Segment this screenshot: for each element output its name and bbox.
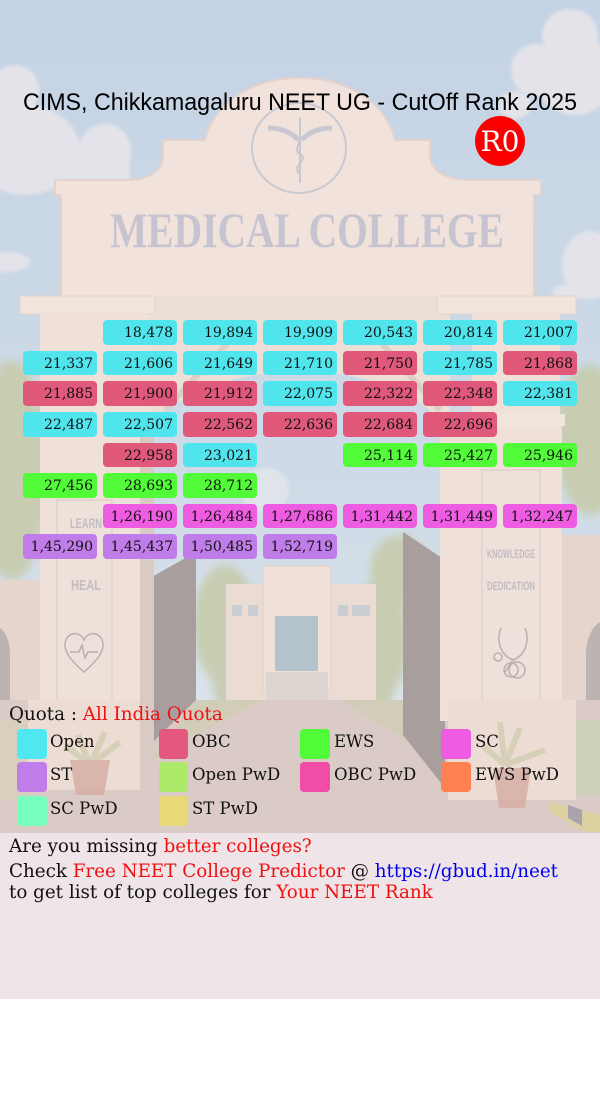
cutoff rank grid: 19,894	[204, 325, 253, 341]
cutoff rank grid: 22,487	[44, 417, 93, 433]
cutoff rank grid: 23,021	[204, 448, 253, 464]
cutoff rank grid: 21,912	[204, 386, 253, 402]
cutoff rank grid: 21,868	[524, 356, 573, 372]
cutoff rank grid: 22,696	[444, 417, 493, 433]
cutoff rank grid: 22,636	[284, 417, 333, 433]
round badge: R0: R0	[481, 125, 519, 158]
cutoff rank grid: 1,45,290	[31, 539, 93, 555]
icon: heart	[65, 634, 103, 672]
arch beam	[140, 296, 450, 425]
cutoff rank grid: 21,649	[204, 356, 253, 372]
legend: SC PwD	[50, 799, 118, 818]
cutoff rank grid: 28,693	[124, 478, 173, 494]
cutoff rank grid: 27,456	[44, 478, 93, 494]
cutoff rank grid: 1,32,247	[511, 508, 573, 524]
legend: OBC PwD	[334, 765, 416, 784]
promo body: to get list of top colleges for Your NEET Rank	[9, 882, 433, 903]
cutoff rank grid: 21,007	[524, 325, 573, 341]
cutoff rank grid: 25,946	[524, 448, 573, 464]
central building	[226, 566, 376, 710]
cutoff rank grid	[23, 320, 577, 559]
cutoff rank grid: 22,562	[204, 417, 253, 433]
cutoff rank grid: 1,52,719	[271, 539, 333, 555]
cutoff rank grid: 20,543	[364, 325, 413, 341]
title: CIMS, Chikkamagaluru NEET UG - CutOff Rank 2025	[23, 89, 577, 116]
legend: EWS PwD	[475, 765, 559, 784]
cutoff rank grid: 22,075	[284, 386, 333, 402]
cutoff rank grid: 21,900	[124, 386, 173, 402]
background sign: MEDICAL COLLEGE	[110, 202, 504, 258]
icon: stethoscope	[494, 628, 527, 678]
cutoff rank grid: 20,814	[444, 325, 493, 341]
cutoff rank grid: 1,31,449	[431, 508, 493, 524]
cutoff rank grid: 19,909	[284, 325, 333, 341]
pier words: KNOWLEDGE	[487, 547, 535, 561]
cutoff rank grid: 21,710	[284, 356, 333, 372]
cutoff rank grid: 1,26,190	[111, 508, 173, 524]
cutoff rank grid: 25,114	[364, 448, 413, 464]
cutoff rank grid: 25,427	[444, 448, 493, 464]
cutoff rank grid: 18,478	[124, 325, 173, 341]
potted plants	[65, 722, 545, 808]
cutoff rank grid: 28,712	[204, 478, 253, 494]
cutoff rank grid: 21,785	[444, 356, 493, 372]
gates	[150, 532, 445, 788]
quota label: Quota : All India Quota	[9, 704, 223, 725]
legend: Open PwD	[192, 765, 280, 784]
cutoff rank grid: 1,45,437	[111, 539, 173, 555]
legend: OBC	[192, 732, 231, 751]
legend: ST	[50, 765, 72, 784]
pier words: DEDICATION	[487, 579, 535, 593]
legend: Open	[50, 732, 94, 751]
cutoff rank grid: 22,381	[524, 386, 573, 402]
pediment	[55, 78, 541, 300]
cutoff rank grid: 21,885	[44, 386, 93, 402]
pier words: LEARN	[70, 515, 102, 531]
trees	[0, 360, 600, 715]
promo panel	[0, 833, 600, 999]
promo body: Check Free NEET College Predictor @ https://gbud.in/neet	[9, 861, 558, 882]
cutoff rank grid: 1,31,442	[351, 508, 413, 524]
legend: SC	[475, 732, 499, 751]
round badge: R0	[475, 116, 525, 166]
legend	[17, 729, 559, 826]
pier words: HEAL	[71, 577, 101, 594]
cutoff rank grid: 21,337	[44, 356, 93, 372]
left pier	[20, 296, 155, 790]
cutoff rank grid: 22,507	[124, 417, 173, 433]
right bushes and curb	[550, 720, 600, 832]
cutoff rank grid: 1,26,484	[191, 508, 253, 524]
cutoff rank grid: 21,750	[364, 356, 413, 372]
right pier	[437, 296, 576, 800]
cutoff rank grid: 22,958	[124, 448, 173, 464]
emblem	[252, 103, 346, 193]
legend: ST PwD	[192, 799, 258, 818]
cutoff rank grid: 22,322	[364, 386, 413, 402]
legend: EWS	[334, 732, 374, 751]
cutoff rank grid: 21,606	[124, 356, 173, 372]
cutoff rank grid: 22,684	[364, 417, 413, 433]
road	[0, 700, 600, 833]
promo headline: Are you missing better colleges?	[9, 836, 312, 857]
cutoff rank grid: 22,348	[444, 386, 493, 402]
cutoff rank grid: 1,27,686	[271, 508, 333, 524]
cutoff rank grid: 1,50,485	[191, 539, 253, 555]
side wings	[0, 535, 600, 730]
pier words	[70, 515, 535, 594]
promo body	[9, 861, 558, 903]
